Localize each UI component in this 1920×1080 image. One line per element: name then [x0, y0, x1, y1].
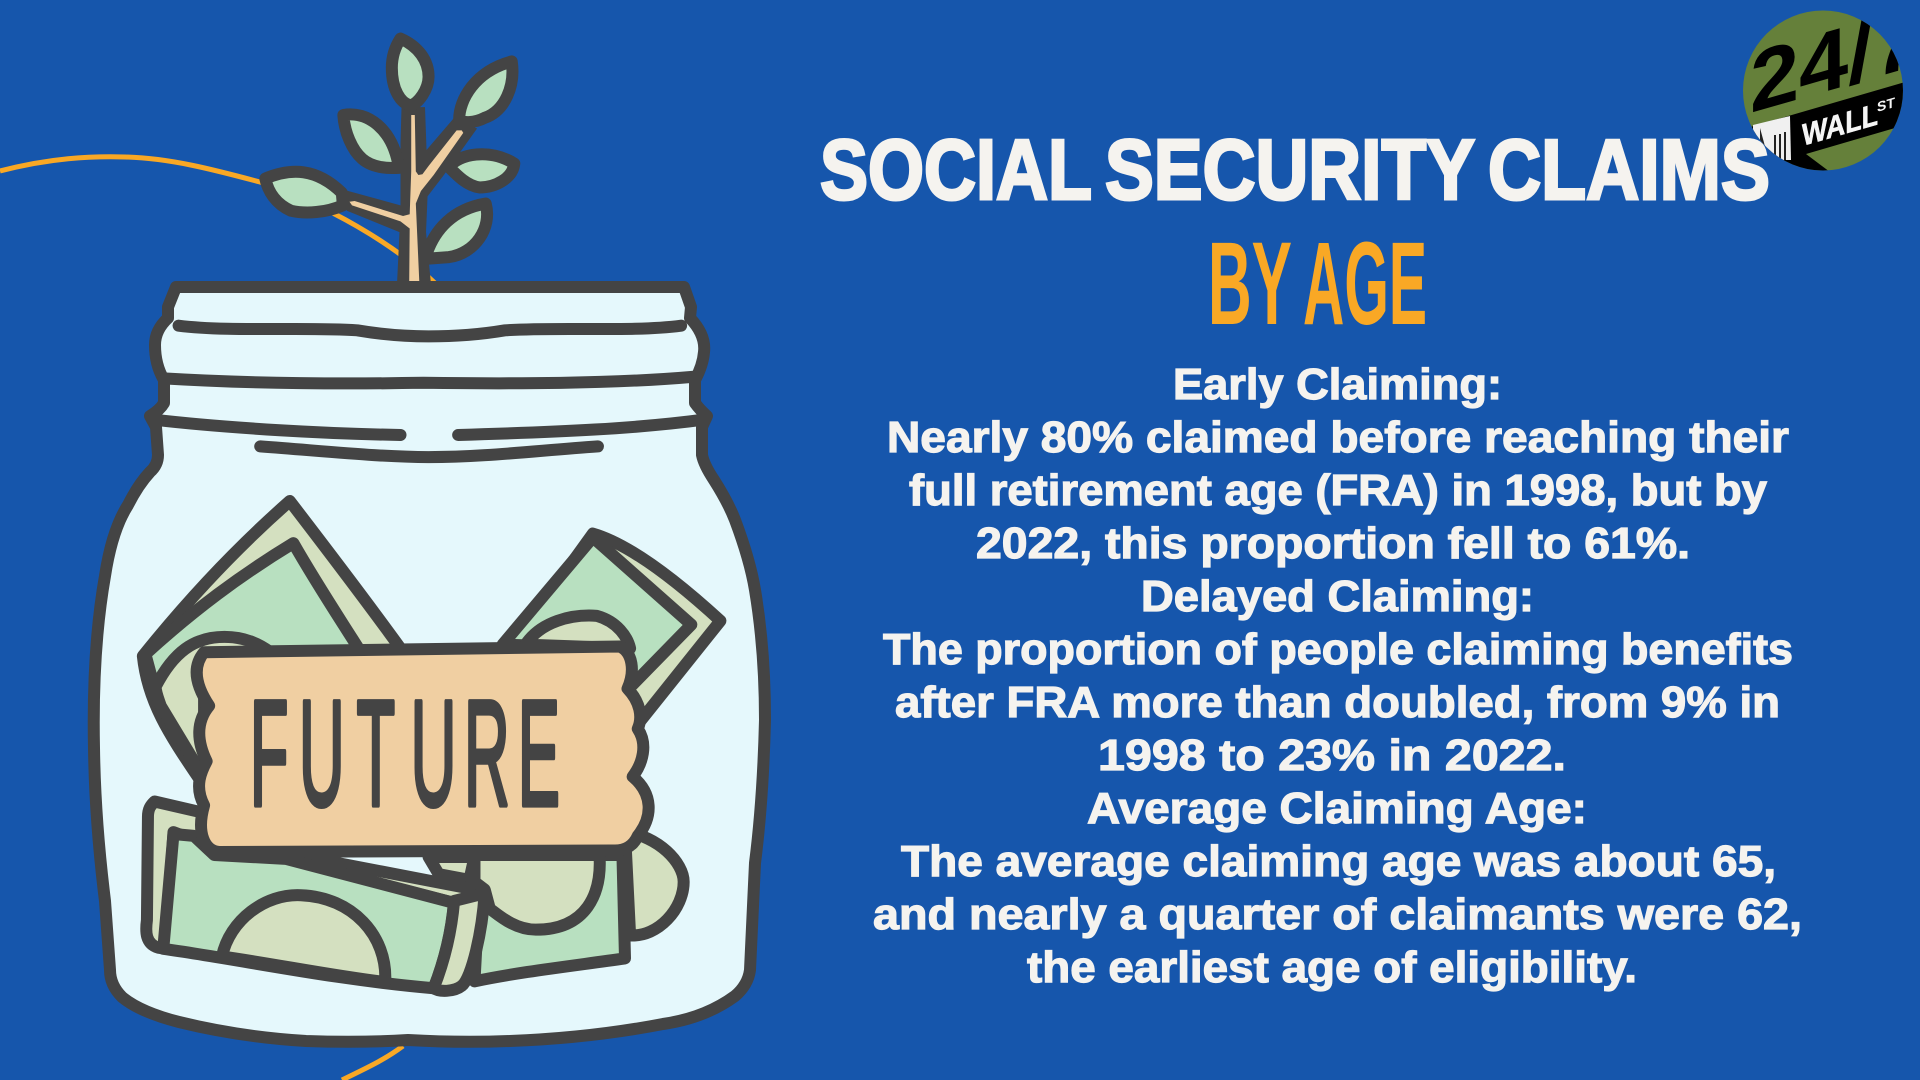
top-left bill	[143, 501, 401, 786]
average claiming age: Average Claiming Age:	[1087, 784, 1587, 833]
bottom-right bill and coins	[625, 832, 684, 936]
delayed claiming: 1998 to 23% in 2022.	[1098, 731, 1566, 780]
logo: 24/7 Wall St: ST	[1877, 95, 1895, 116]
future label text: FUTURE	[250, 671, 560, 838]
text: AGE	[1303, 218, 1427, 350]
average claiming age: The average claiming age was about 65,	[901, 837, 1776, 886]
delayed claiming: Delayed Claiming:	[1141, 572, 1534, 621]
illustration: money inside jar	[143, 501, 720, 991]
logo: 24/7 Wall St	[1743, 10, 1903, 170]
illustration: plant growing from jar	[265, 39, 514, 286]
body text	[873, 360, 1802, 992]
top-right bill	[510, 534, 720, 721]
leaves	[265, 39, 514, 259]
subtitle: BY	[1208, 218, 1292, 350]
delayed claiming: The proportion of people claiming benefits	[883, 625, 1793, 674]
title: SECURITY	[1105, 123, 1475, 218]
early claiming: full retirement age (FRA) in 1998, but by	[909, 466, 1768, 515]
future label tag	[197, 646, 649, 852]
early claiming: 2022, this proportion fell to 61%.	[976, 519, 1690, 568]
title: CLAIMS	[1488, 123, 1770, 218]
average claiming age	[873, 784, 1802, 992]
bottom-left bill	[146, 801, 204, 949]
plant stem outline	[342, 107, 477, 286]
delayed claiming: after FRA more than doubled, from 9% in	[895, 678, 1780, 727]
plant stem	[349, 115, 463, 284]
average claiming age: and nearly a quarter of claimants were 62,	[873, 890, 1802, 939]
early claiming: Early Claiming:	[1173, 360, 1502, 409]
early claiming	[887, 360, 1789, 568]
jar rim and neck lines	[153, 326, 704, 457]
average claiming age: the earliest age of eligibility.	[1027, 943, 1637, 992]
title: SOCIAL	[820, 123, 1092, 218]
logo: 24/7 Wall St: WALL	[1802, 96, 1878, 153]
orange arc behind jar	[0, 157, 436, 1080]
delayed claiming	[883, 572, 1793, 780]
early claiming: Nearly 80% claimed before reaching their	[887, 413, 1789, 462]
illustration: glass jar	[94, 287, 765, 1042]
title	[820, 123, 1770, 218]
